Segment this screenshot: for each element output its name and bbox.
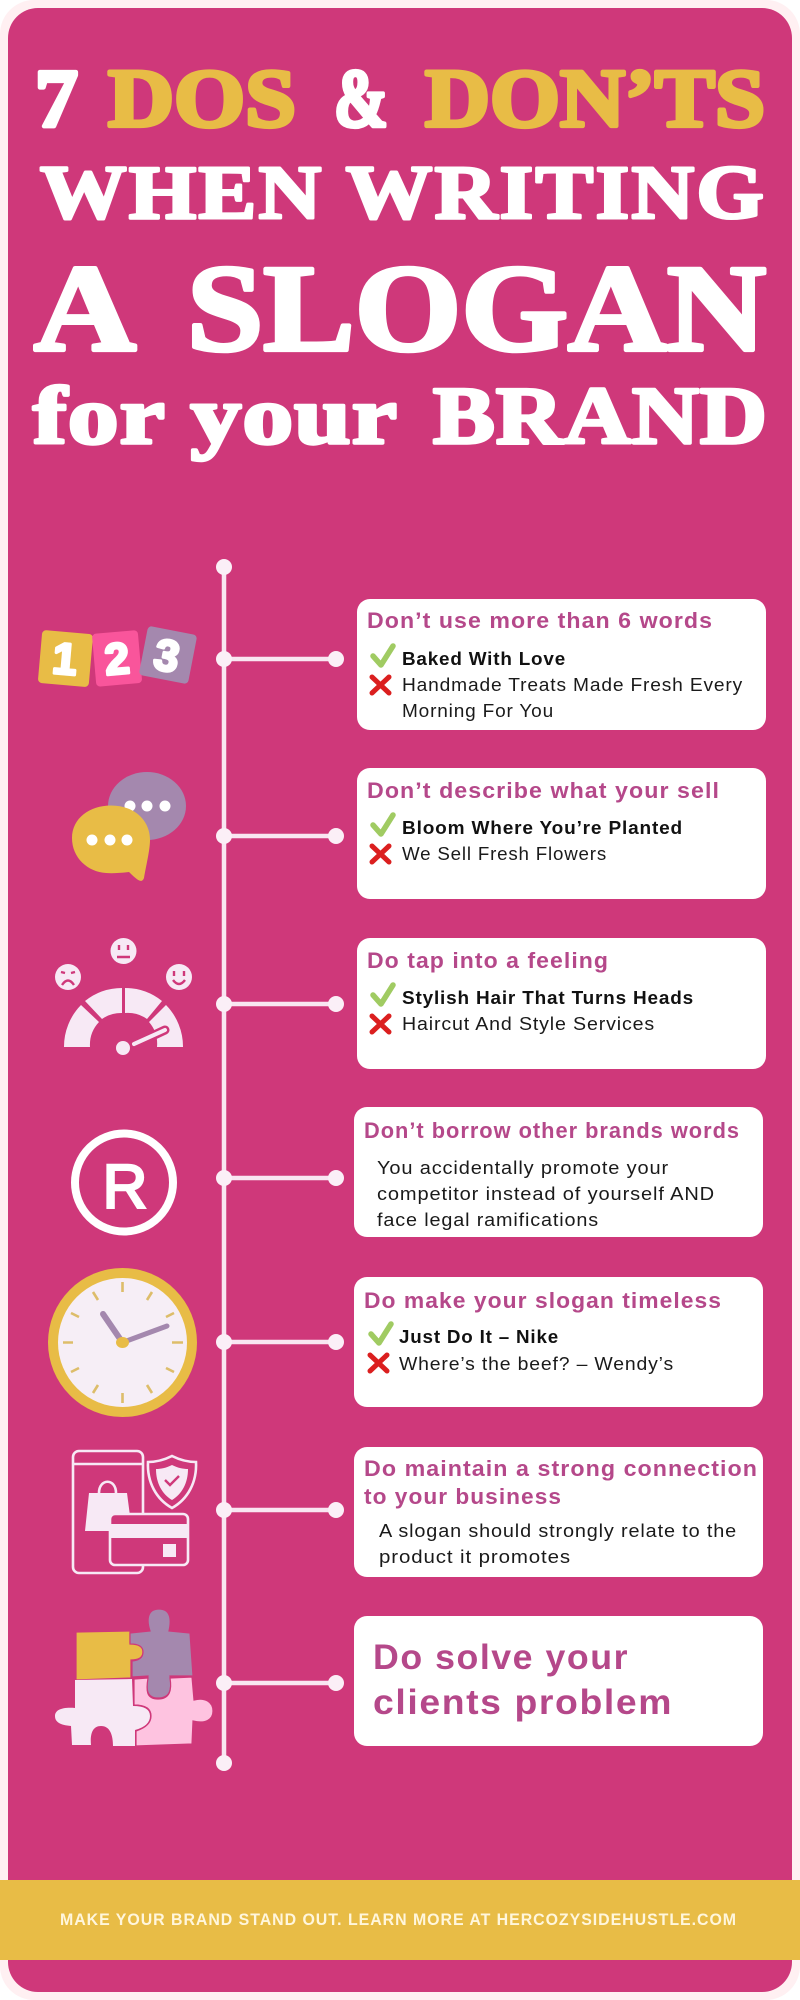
panel: don't use more than 6 words: Morning For You — [402, 700, 554, 721]
panel: do maintain a strong connection: A slogan should strongly relate to the — [379, 1520, 737, 1541]
panel: don't borrow other brands words — [354, 1107, 763, 1237]
title — [33, 52, 768, 461]
panel: do make your slogan timeless: Just Do It – Nike — [399, 1326, 559, 1347]
panel: don't borrow other brands words: competitor instead of yourself AND — [377, 1183, 715, 1204]
panel: do tap into a feeling: Do tap into a feeling — [367, 948, 609, 973]
panel: don't describe what your sell: We Sell Fresh Flowers — [402, 843, 607, 864]
panel: do maintain a strong connection: to your business — [364, 1484, 562, 1509]
panel: do make your slogan timeless: Where’s the beef? – Wendy’s — [399, 1353, 674, 1374]
panel: don't describe what your sell: Don’t describe what your sell — [367, 778, 720, 803]
panel: don't borrow other brands words: face legal ramifications — [377, 1209, 599, 1230]
title: WHEN WRITING — [40, 151, 766, 235]
panel: don't borrow other brands words: You accidentally promote your — [377, 1157, 669, 1178]
panel: do tap into a feeling — [357, 938, 766, 1069]
panel: do make your slogan timeless: Do make your slogan timeless — [364, 1288, 722, 1313]
panel: do tap into a feeling: Stylish Hair That Turns Heads — [402, 987, 694, 1008]
timeline — [216, 559, 344, 1771]
title: DON’TS — [425, 52, 765, 144]
panel: don't borrow other brands words: Don’t borrow other brands words — [364, 1118, 740, 1143]
title: A — [34, 240, 136, 377]
footer band: MAKE YOUR BRAND STAND OUT. LEARN MORE AT HERCOZYSIDEHUSTLE.COM — [60, 1911, 737, 1929]
panel: do maintain a strong connection: Do maintain a strong connection — [364, 1456, 758, 1481]
icon: clock — [48, 1268, 197, 1417]
panel: don't use more than 6 words: Baked With Love — [402, 648, 566, 669]
panel: don't use more than 6 words: Handmade Treats Made Fresh Every — [402, 674, 743, 695]
panel: do solve your clients problem — [354, 1616, 763, 1746]
panel: do solve your clients problem: clients problem — [373, 1683, 673, 1722]
panel: don't describe what your sell — [357, 768, 766, 899]
panel: do maintain a strong connection — [354, 1447, 763, 1577]
icon: 1 2 3 tiles: 3 — [150, 630, 183, 683]
panel: don't use more than 6 words — [357, 599, 766, 730]
icon: 1 2 3 tiles: 2 — [103, 634, 131, 685]
icon: registered trademark: R — [103, 1153, 147, 1222]
title: for your — [33, 370, 398, 461]
icon: chat bubbles — [72, 772, 186, 881]
panel: do solve your clients problem: Do solve your — [373, 1638, 629, 1677]
icon: satisfaction gauge — [55, 938, 192, 1055]
footer band — [0, 1880, 800, 1960]
icon: registered trademark — [75, 1134, 173, 1232]
panel: don't use more than 6 words: Don’t use more than 6 words — [367, 608, 713, 633]
panel: don't describe what your sell: Bloom Where You’re Planted — [402, 817, 683, 838]
title: DOS — [108, 52, 296, 144]
panel: do tap into a feeling: Haircut And Style Services — [402, 1013, 655, 1034]
title: 7 — [35, 52, 78, 144]
icon: 1 2 3 tiles: 1 — [51, 634, 79, 685]
title: BRAND — [433, 370, 768, 461]
icon: puzzle pieces — [55, 1609, 213, 1746]
title: SLOGAN — [187, 240, 766, 377]
icon: mobile shopping and payment — [73, 1451, 196, 1573]
panel: do maintain a strong connection: product it promotes — [379, 1546, 571, 1567]
title: & — [334, 52, 388, 144]
panel: do make your slogan timeless — [354, 1277, 763, 1407]
icon: 1 2 3 tiles — [38, 626, 197, 687]
